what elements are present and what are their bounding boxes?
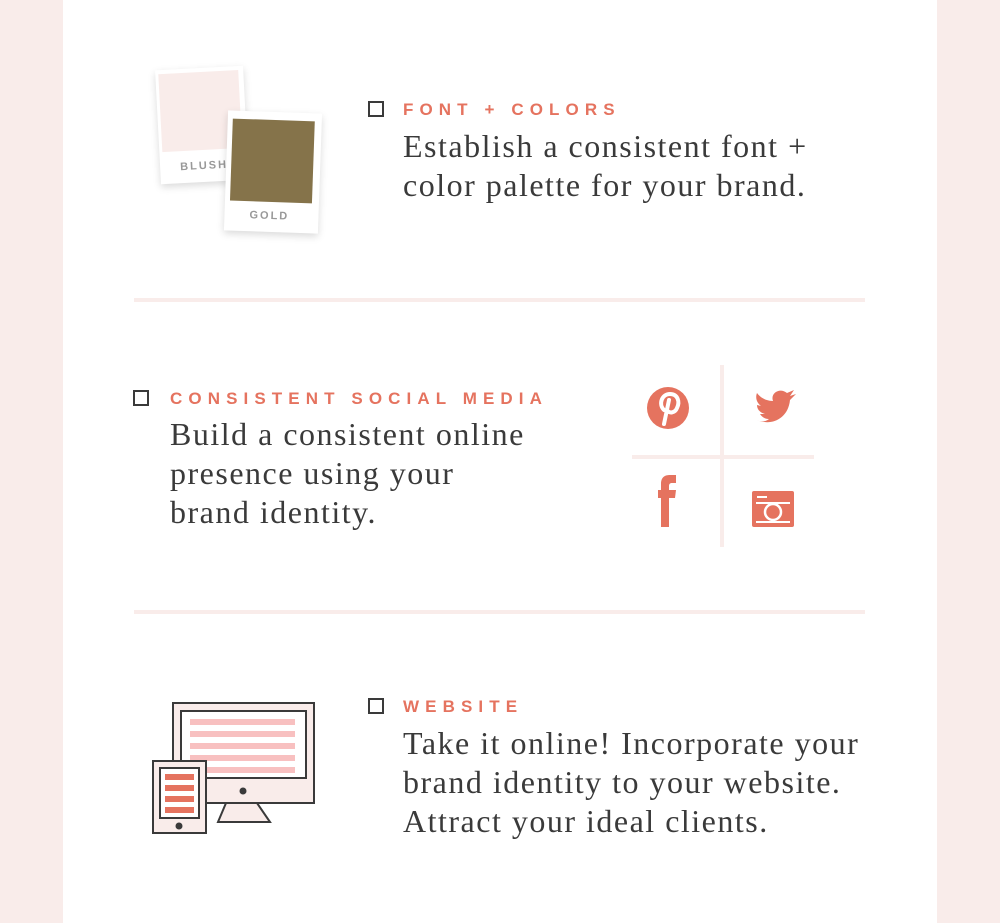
text: font + colors: Establish a consistent font + bbox=[403, 128, 808, 164]
heading: font + colors: FONT + COLORS bbox=[403, 100, 621, 119]
icon: pinterest bbox=[647, 387, 689, 429]
icon: color swatches bbox=[153, 69, 324, 239]
text: font + colors: color palette for your brand. bbox=[403, 167, 806, 203]
text: website: Take it online! Incorporate your bbox=[403, 725, 859, 761]
swatch: gold: GOLD bbox=[249, 209, 289, 223]
checkbox: website bbox=[368, 698, 384, 714]
heading: website: WEBSITE bbox=[403, 697, 523, 716]
text: website bbox=[403, 725, 859, 839]
heading: social: CONSISTENT SOCIAL MEDIA bbox=[170, 389, 548, 408]
text: social bbox=[170, 416, 525, 530]
text: social: presence using your bbox=[170, 455, 454, 491]
tablet bbox=[153, 761, 206, 833]
text: social: brand identity. bbox=[170, 494, 377, 530]
checkbox: font + colors bbox=[368, 101, 384, 117]
text: website: Attract your ideal clients. bbox=[403, 803, 769, 839]
icon: devices bbox=[152, 702, 315, 834]
icon: facebook bbox=[658, 475, 676, 527]
swatch: blush: BLUSH bbox=[180, 159, 228, 173]
swatch: blush bbox=[155, 66, 249, 184]
text: font + colors bbox=[403, 128, 808, 203]
swatch: gold bbox=[224, 110, 322, 234]
icon: twitter bbox=[756, 390, 796, 422]
text: website: brand identity to your website. bbox=[403, 764, 841, 800]
icon grid: social media bbox=[632, 365, 814, 547]
icon: camera bbox=[752, 491, 794, 527]
text: social: Build a consistent online bbox=[170, 416, 525, 452]
checkbox: social bbox=[133, 390, 149, 406]
monitor bbox=[173, 703, 314, 822]
